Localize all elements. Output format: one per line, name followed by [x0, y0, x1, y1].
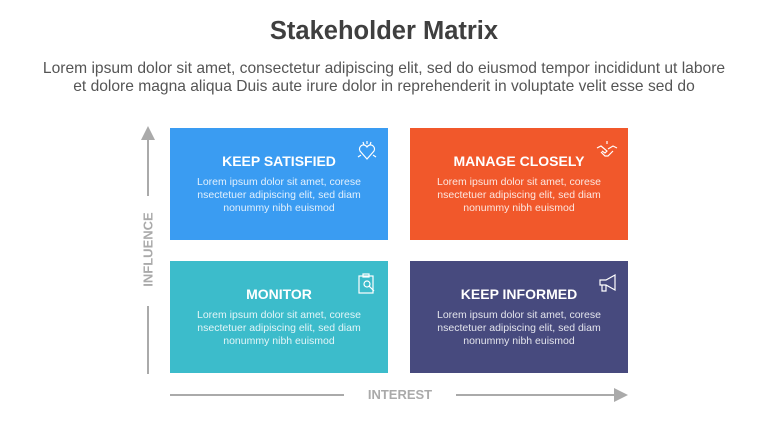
panel: monitor: MONITOR — [246, 286, 312, 302]
panel: monitor: Lorem ipsum dolor sit amet, corese — [197, 309, 361, 321]
panel: keep satisfied: Lorem ipsum dolor sit amet, corese — [197, 176, 361, 188]
label: interest: INTEREST — [368, 387, 432, 402]
panel: keep informed: Lorem ipsum dolor sit amet, corese — [437, 309, 601, 321]
title: Stakeholder Matrix — [270, 17, 498, 45]
panel: monitor: nsectetuer adipiscing elit, sed diam — [197, 322, 361, 334]
panel: manage closely: nsectetuer adipiscing elit, sed diam — [437, 189, 601, 201]
arrow: interest axis — [170, 388, 628, 402]
panel: monitor — [170, 261, 388, 373]
panel: keep informed: nonummy nibh euismod — [463, 335, 575, 347]
panel: keep informed — [410, 261, 628, 373]
icon: clipboard — [358, 273, 374, 294]
subtitle — [43, 60, 725, 94]
panel: manage closely: Lorem ipsum dolor sit amet, corese — [437, 176, 601, 188]
panel: keep satisfied: nonummy nibh euismod — [223, 202, 335, 214]
label: influence: INFLUENCE — [140, 212, 156, 287]
icon: megaphone — [599, 274, 616, 292]
panel: manage closely: MANAGE CLOSELY — [454, 153, 584, 169]
panel: monitor: nonummy nibh euismod — [223, 335, 335, 347]
panel: keep satisfied: nsectetuer adipiscing elit, sed diam — [197, 189, 361, 201]
panel: manage closely: nonummy nibh euismod — [463, 202, 575, 214]
panel: keep satisfied: KEEP SATISFIED — [222, 153, 336, 169]
panel: keep informed: KEEP INFORMED — [461, 286, 577, 302]
arrow: influence axis — [141, 126, 155, 374]
icon: handshake — [596, 141, 618, 157]
panel: keep informed: nsectetuer adipiscing elit, sed diam — [437, 322, 601, 334]
panel: manage closely — [410, 128, 628, 240]
subtitle: Lorem ipsum dolor sit amet, consectetur adipiscing elit, sed do eiusmod tempor incididunt ut labore — [43, 60, 725, 77]
subtitle: et dolore magna aliqua Duis aute irure dolor in reprehenderit in voluptate velit esse sed do — [73, 78, 695, 94]
panel: keep satisfied — [170, 128, 388, 240]
icon: heart — [358, 141, 376, 160]
